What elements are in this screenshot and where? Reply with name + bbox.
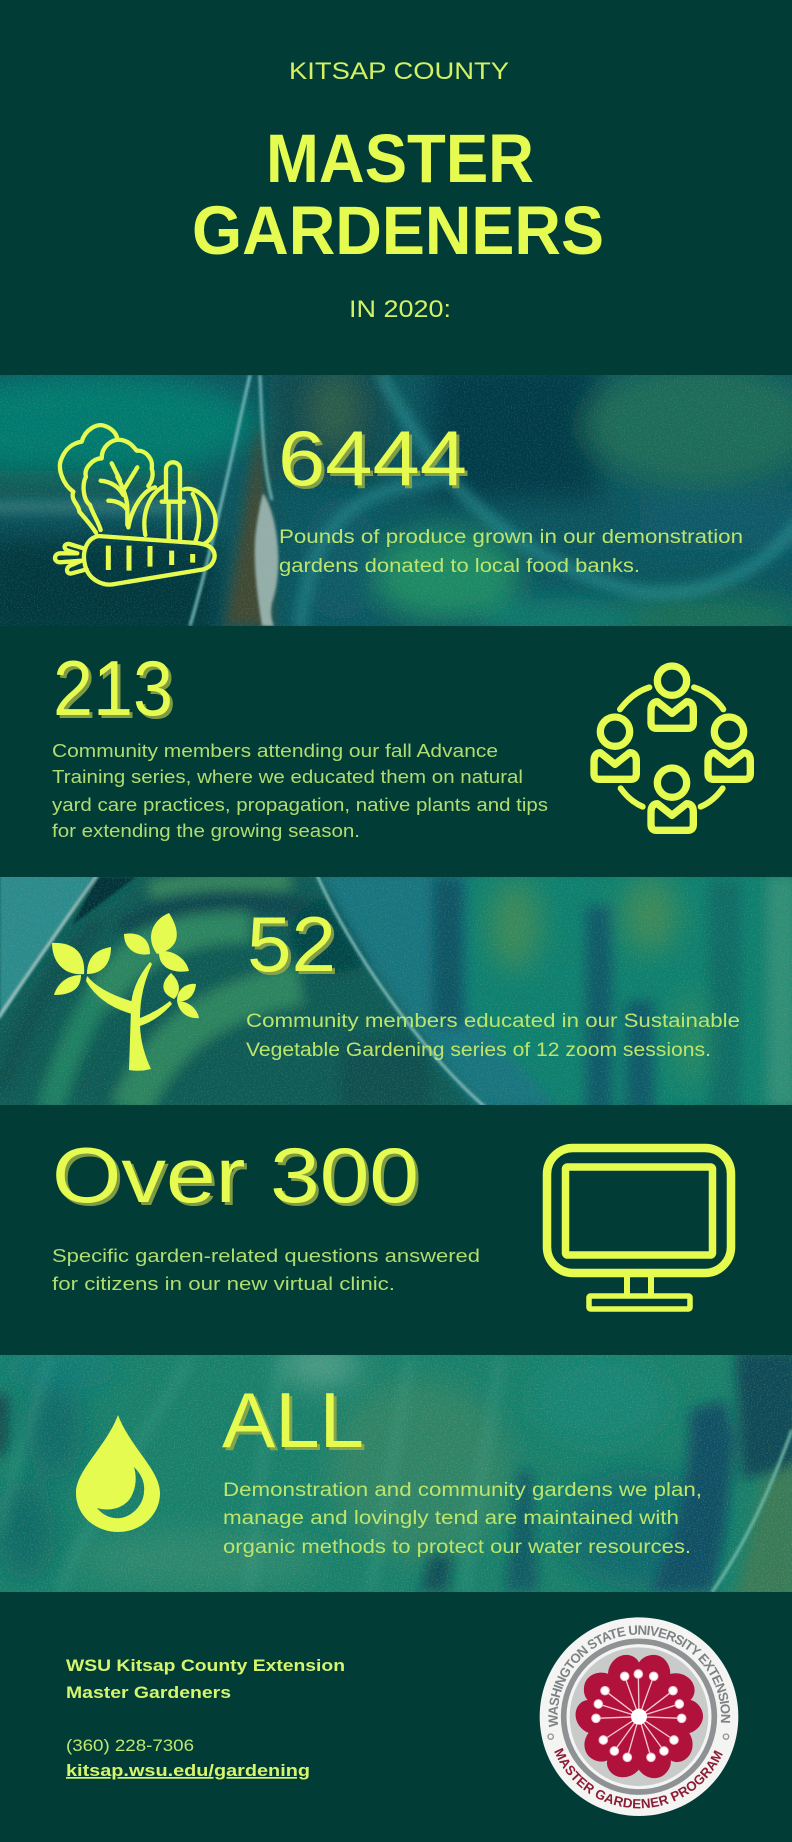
contact name: Master Gardeners (66, 1683, 231, 1702)
logo: WSU Extension Master Gardener Program (540, 1617, 738, 1816)
text: produce description (279, 527, 743, 577)
panel: 213 community members (52, 644, 750, 841)
subheading: in 2020: IN 2020: (349, 296, 451, 323)
icon: vegetables (55, 425, 216, 585)
text: advance training description: Community members attending our fall Advance (52, 740, 498, 761)
title: GARDENERS (192, 192, 604, 269)
stat: 52: 52 (247, 900, 336, 988)
text: advance training description: Training series, where we educated them on natural (52, 766, 523, 787)
text: produce description: Pounds of produce grown in our demonstration (279, 527, 743, 548)
title (192, 120, 604, 269)
flower (571, 1655, 707, 1785)
contact name: WSU Kitsap County Extension (66, 1656, 345, 1675)
leaf photo background 2 (0, 870, 792, 1115)
text: vegetable gardening description: Vegetable Gardening series of 12 zoom sessions. (246, 1040, 711, 1061)
icon: tree (52, 913, 199, 1071)
text: virtual clinic description (52, 1245, 480, 1294)
text: organic methods description: organic methods to protect our water resources. (223, 1537, 691, 1558)
website link: kitsap.wsu.edu/gardening (66, 1761, 310, 1780)
stat: 213: 213 (53, 644, 173, 732)
leaf photo background 1 (0, 375, 792, 626)
phone number: (360) 228-7306 (66, 1736, 194, 1755)
text: organic methods description: Demonstration and community gardens we plan, (223, 1480, 702, 1501)
text: vegetable gardening description (246, 1011, 740, 1061)
text: virtual clinic description: for citizens in our new virtual clinic. (52, 1273, 395, 1294)
text: advance training description (52, 740, 548, 841)
footer (66, 1617, 738, 1816)
heading: Kitsap County: KITSAP COUNTY (289, 58, 509, 85)
icon: water drop (76, 1415, 160, 1532)
text: advance training description: yard care practices, propagation, native plants and tips (52, 794, 548, 815)
contact name (66, 1656, 345, 1702)
text: produce description: gardens donated to local food banks. (279, 556, 640, 577)
icon: computer monitor (547, 1148, 731, 1309)
leaf photo background 3 (0, 1343, 792, 1600)
stat: over 300: Over 300 (52, 1131, 419, 1219)
header (192, 58, 604, 323)
stat: all: ALL (222, 1376, 364, 1464)
stat: 6444: 6444 (278, 414, 467, 502)
text: organic methods description (223, 1480, 702, 1558)
title: MASTER (266, 120, 534, 197)
text: vegetable gardening description: Community members educated in our Sustainable (246, 1011, 740, 1032)
text: virtual clinic description: Specific garden-related questions answered (52, 1245, 480, 1266)
logo: WSU Extension Master Gardener Program: MASTER GARDENER PROGRAM (554, 1748, 723, 1808)
text: organic methods description: manage and lovingly tend are maintained with (223, 1508, 679, 1529)
panel: 6444 pounds of produce (0, 375, 792, 626)
logo: WSU Extension Master Gardener Program: WASHINGTON STATE UNIVERSITY EXTENSION (548, 1625, 730, 1728)
panel: 52 community members (0, 870, 792, 1115)
icon: people in a circle (594, 666, 750, 830)
panel: all gardens organic (0, 1343, 792, 1600)
text: advance training description: for extending the growing season. (52, 820, 360, 841)
panel: over 300 questions (52, 1131, 731, 1309)
